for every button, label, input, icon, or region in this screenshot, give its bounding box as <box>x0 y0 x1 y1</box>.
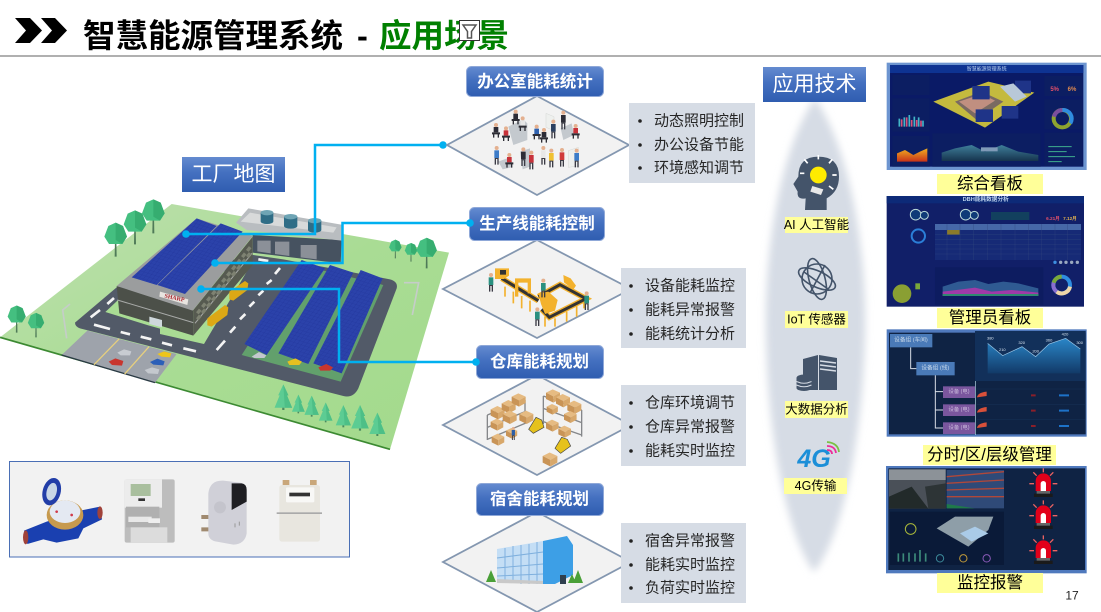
list: production: 设备能耗监控 <box>645 278 735 294</box>
dashboard: time zone hierarchy: 300 <box>1076 340 1084 345</box>
label: big data: 大数据分析 <box>785 402 848 416</box>
solar carports <box>244 260 383 373</box>
ground <box>0 204 449 449</box>
list: office: 办公设备节能 <box>654 136 744 154</box>
trees <box>8 199 437 436</box>
meters panel <box>10 462 350 557</box>
title text green: 应用场景 <box>379 18 509 54</box>
street lamps <box>63 283 419 338</box>
icon: alarm light top <box>1029 468 1057 497</box>
dashboard: time zone hierarchy: 360 <box>1046 337 1053 342</box>
label: office <box>466 66 604 96</box>
panel: monitoring screen <box>890 512 1004 565</box>
panel: dormitory energy planning <box>443 484 746 612</box>
icon: filter badge <box>460 20 480 40</box>
dashboard: time zone hierarchy: 420 <box>1062 331 1069 336</box>
parking lot <box>62 331 177 383</box>
solar carport ground <box>242 265 383 382</box>
icon: water meter <box>23 476 103 544</box>
list: office: 动态照明控制 <box>654 112 744 130</box>
title text black: 智慧能源管理系统 <box>83 18 343 54</box>
icon: IoT atom <box>795 257 839 301</box>
illustration: warehouse <box>487 389 582 466</box>
label: dormitory: 宿舍能耗规划 <box>490 488 589 508</box>
dashboard: time zone hierarchy <box>887 329 1087 437</box>
main factory building: SHARP <box>164 294 185 304</box>
illustration: production line <box>489 268 589 327</box>
list: warehouse <box>621 385 746 466</box>
panel: production line energy control <box>443 208 746 348</box>
list: warehouse: 仓库异常报警 <box>645 418 735 436</box>
back building <box>236 208 343 263</box>
dashboard: overview: 智慧能源管理系统 <box>967 65 1007 72</box>
label: monitoring alarm <box>937 573 1043 593</box>
label: overview board <box>937 174 1043 194</box>
connector lines <box>186 145 476 362</box>
dashboard: time zone hierarchy: 设备组 (线) <box>921 364 949 372</box>
label: production: 生产线能耗控制 <box>479 214 595 233</box>
photo: storage racks <box>947 470 1004 508</box>
dashboard: administrator: DBH能耗数据分析 <box>963 195 1009 203</box>
connector dot: warehouse <box>472 358 480 366</box>
list: production: 能耗异常报警 <box>645 302 735 318</box>
label: warehouse: 仓库能耗规划 <box>490 351 589 371</box>
label: warehouse <box>476 346 604 378</box>
photo: workshop <box>889 469 946 509</box>
diamond: production <box>443 240 631 338</box>
dashboard: administrator: 7.12月 <box>1063 216 1077 222</box>
list: office <box>629 103 755 183</box>
list: dormitory: 能耗实时监控 <box>645 556 735 574</box>
green islands <box>105 265 251 344</box>
connector: warehouse <box>201 289 476 362</box>
icon: AI head with bulb <box>793 155 839 210</box>
list: dormitory: 宿舍异常报警 <box>645 532 735 550</box>
label: monitoring alarm: 监控报警 <box>957 573 1023 592</box>
panel: office energy statistics <box>447 66 755 195</box>
label: administrator board: 管理员看板 <box>949 308 1031 327</box>
connector: office <box>186 145 443 234</box>
heading: application technologies: 应用技术 <box>772 73 856 96</box>
connector dots <box>182 141 447 293</box>
dashboard: time zone hierarchy: 设备 (电) <box>948 405 970 413</box>
icon: 4G: 4G <box>796 445 831 473</box>
road markings <box>91 259 280 351</box>
label: overview board: 综合看板 <box>957 174 1023 193</box>
dashboard: time zone hierarchy: 设备 (电) <box>948 423 970 431</box>
list: office: 环境感知调节 <box>654 158 744 176</box>
dashboard: time zone hierarchy: 设备组 (车间) <box>894 336 928 344</box>
factory map illustration <box>0 199 449 449</box>
dashboard: overview: 6% <box>1068 87 1077 93</box>
illustration: office workers <box>492 110 580 169</box>
heading: factory map <box>182 157 285 192</box>
dashboard: time zone hierarchy: 设备 (电) <box>948 387 970 395</box>
list: dormitory <box>621 523 746 603</box>
icon: double chevrons <box>15 18 67 43</box>
diamond: dormitory <box>443 512 631 612</box>
panel: warehouse energy planning <box>443 346 746 475</box>
icon: electric meter <box>125 479 175 543</box>
dashboard: time zone hierarchy: 380 <box>987 335 994 340</box>
list: warehouse: 仓库环境调节 <box>645 394 735 412</box>
illustration: dormitory building <box>486 536 583 584</box>
dashboard: monitoring alarm <box>886 466 1087 573</box>
list: production: 能耗统计分析 <box>645 326 735 342</box>
dashboard: time zone hierarchy: 210 <box>999 347 1006 352</box>
dashboard: overview <box>887 63 1087 170</box>
label: office: 办公室能耗统计 <box>477 71 593 91</box>
list: production <box>621 268 746 348</box>
label: AI: AI 人工智能 <box>784 217 850 232</box>
label: 4G <box>784 478 847 494</box>
main factory building <box>117 218 253 336</box>
title <box>15 18 509 54</box>
road loop <box>75 255 397 396</box>
diamond: office <box>447 96 629 195</box>
label: 4G: 4G传输 <box>795 478 837 493</box>
title dash: - <box>357 18 368 54</box>
column backdrop <box>766 98 865 572</box>
icon: big data server <box>796 355 837 391</box>
dashboard: administrator <box>887 195 1084 307</box>
dashboard: overview: 5% <box>1050 87 1060 93</box>
icon: smart plug <box>201 481 247 545</box>
label: IoT: IoT 传感器 <box>787 312 846 326</box>
label: production <box>470 208 604 240</box>
list: warehouse: 能耗实时监控 <box>645 442 735 460</box>
icon: gas meter <box>277 480 322 542</box>
icon: alarm light bottom <box>1029 535 1057 564</box>
connector dot: production <box>466 219 474 227</box>
page number: 17 <box>1065 588 1079 602</box>
panel: application technologies <box>763 67 866 572</box>
connector: production line <box>215 223 470 263</box>
label: time zone hierarchy: 分时/区/层级管理 <box>927 445 1052 464</box>
heading: factory map: 工厂地图 <box>192 163 276 186</box>
heading: application technologies <box>763 67 866 102</box>
trucks <box>207 281 248 327</box>
dashboard: time zone hierarchy: 200 <box>1032 348 1040 353</box>
dashboard: administrator: 6.21月 <box>1046 216 1060 222</box>
dashboard: time zone hierarchy: 320 <box>1018 340 1026 345</box>
list: dormitory: 负荷实时监控 <box>645 580 735 596</box>
icon: alarm light middle <box>1029 500 1057 529</box>
diamond: warehouse <box>443 375 631 475</box>
label: dormitory <box>476 484 604 516</box>
